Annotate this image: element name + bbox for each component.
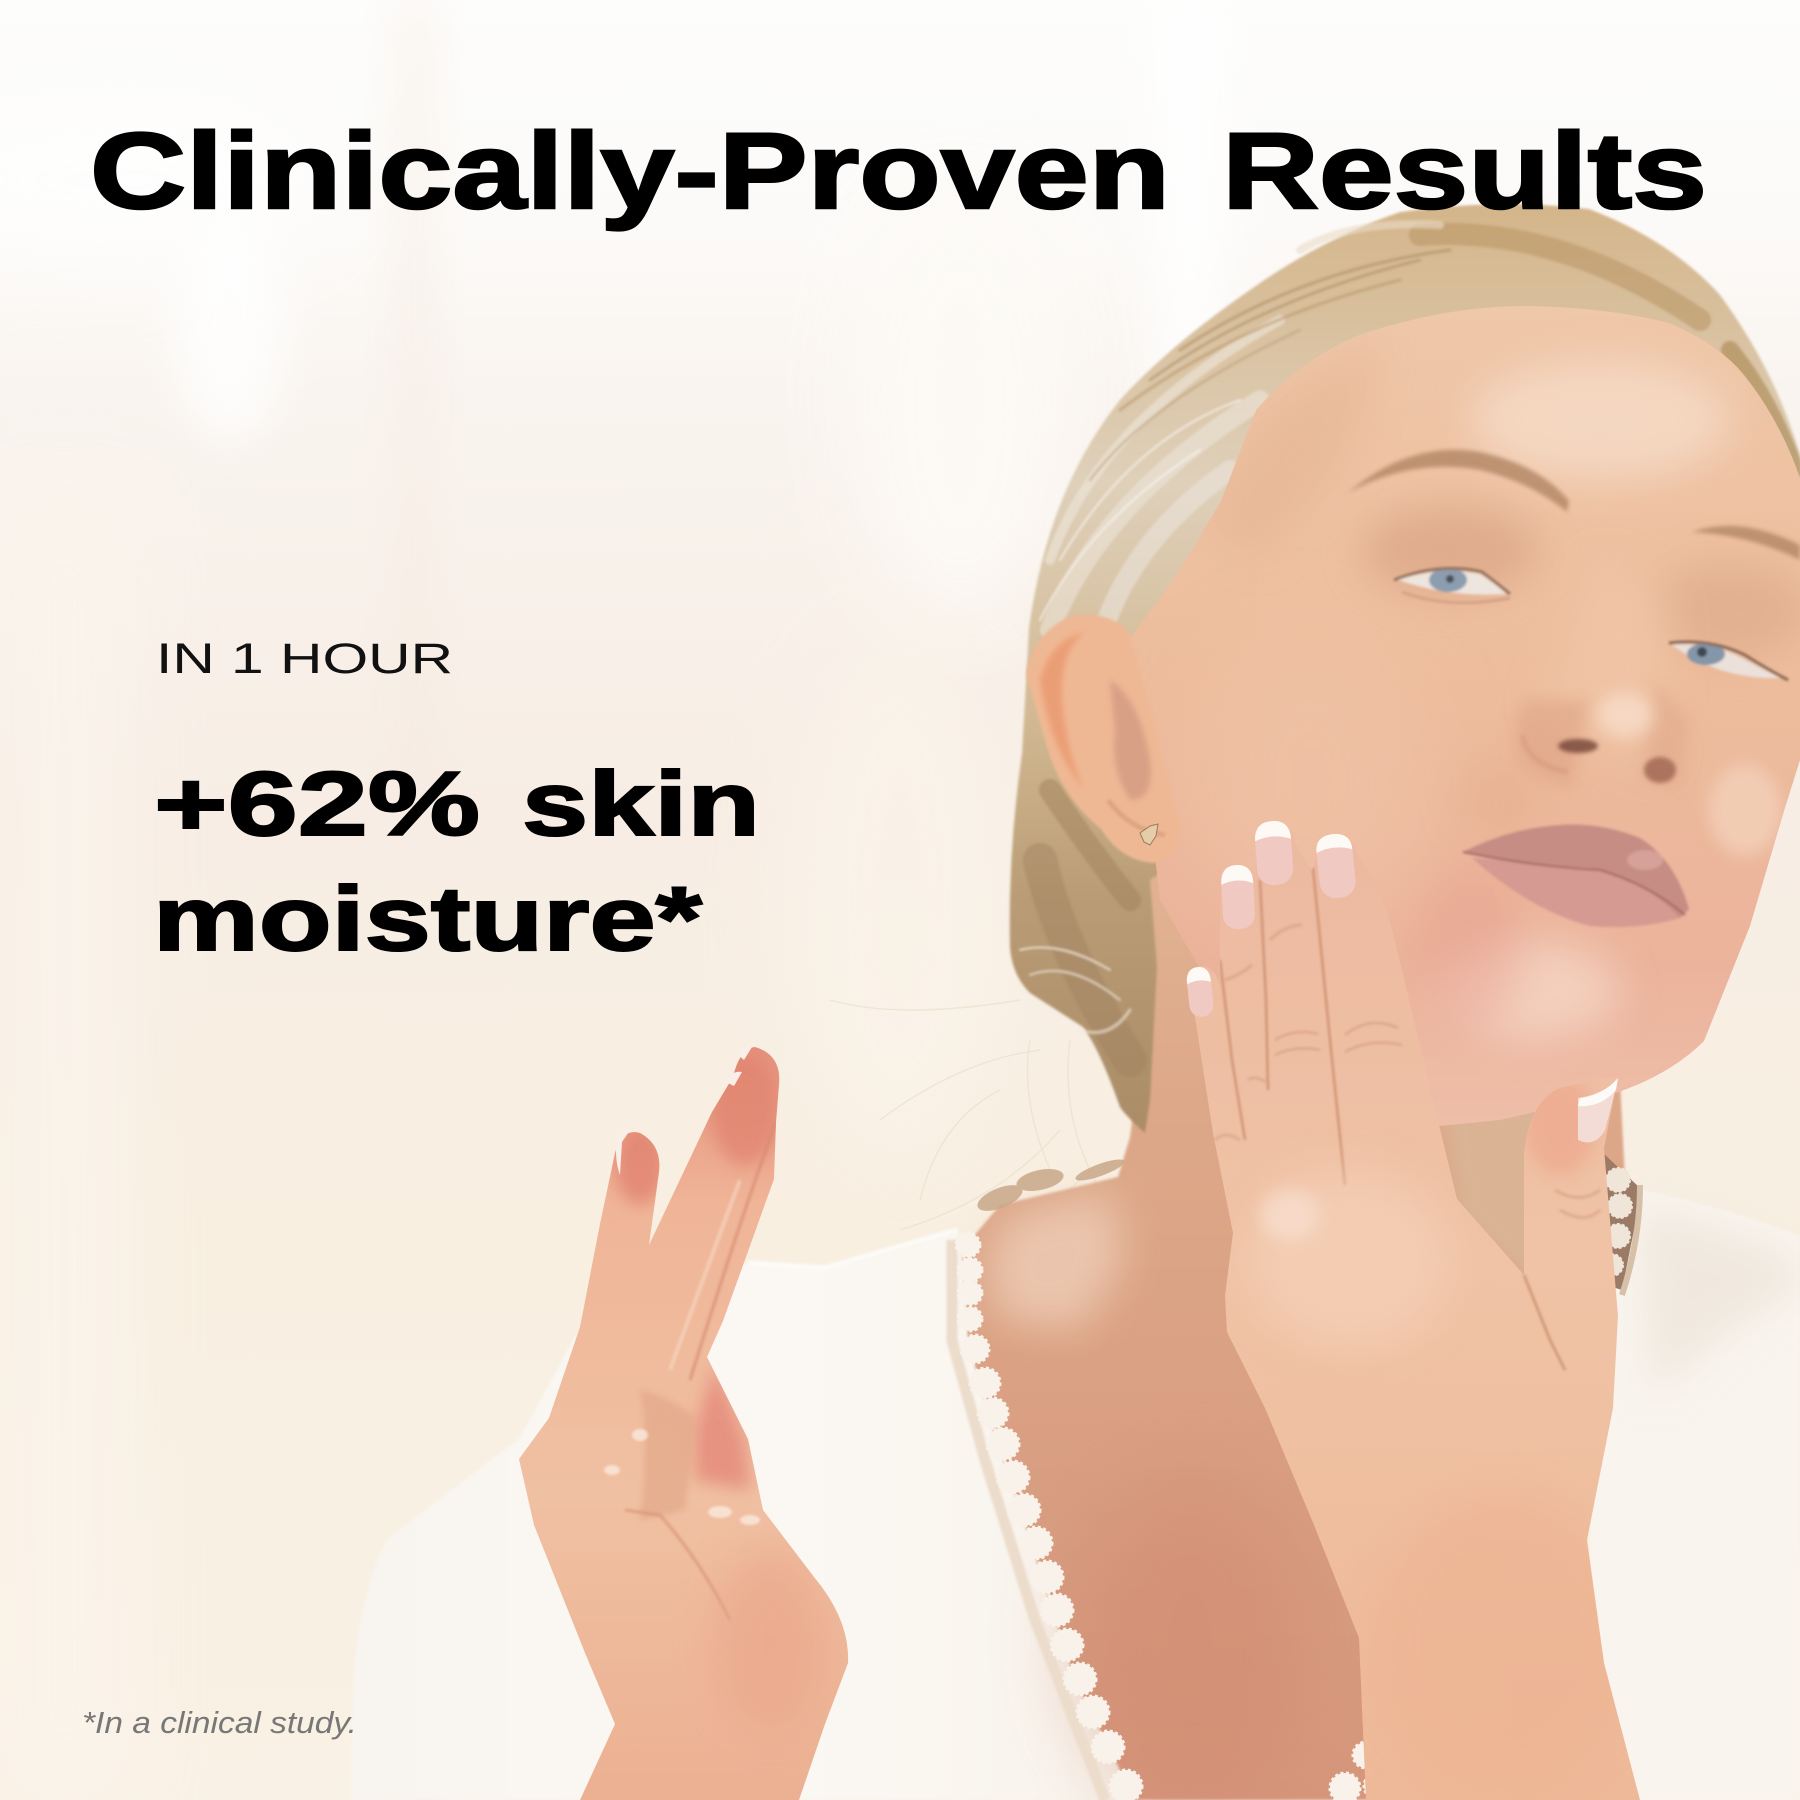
forehead highlight [1470,360,1730,480]
nose side shade [1516,699,1588,784]
photo: woman applying moisturizer [350,204,1800,1800]
lips [1463,825,1689,927]
blouse: left shoulder and sleeve [350,1230,1130,1800]
left hand base [510,1040,860,1800]
fingernails [1185,820,1618,1142]
left eye [1394,568,1510,603]
knuckle fold [640,1390,695,1520]
palm crease [625,1510,730,1620]
mouth surround [1460,760,1540,840]
face [1100,280,1800,1140]
footnote: *In a clinical study. [82,1705,357,1740]
stat headline [153,754,760,970]
hand back highlight [1250,1170,1450,1350]
eye socket shadow left [1360,505,1540,595]
thumb webbing line [1524,1275,1565,1370]
chin highlight [1440,940,1620,1040]
left fingernail tips [616,1046,752,1175]
lace at right collar [1590,1150,1642,1295]
knuckle highlight [1260,1189,1320,1241]
blouse: right shoulder shading [1640,1205,1800,1400]
right eye [1669,642,1788,680]
stray hair strands [830,1000,1100,1380]
title: Clinically-Proven [90,110,1170,231]
earring [1140,824,1158,845]
palm shading [715,1550,825,1730]
timeframe label: IN 1 HOUR [156,635,453,683]
hair strands [1020,224,1795,1060]
nose right side shade [1646,694,1685,778]
nose [1522,735,1676,783]
face base [1100,280,1800,1140]
stat headline: +62% [154,754,480,855]
lace at left collar, tan [974,1155,1126,1216]
finger gaps [1220,868,1345,1185]
nose bridge shading [1588,612,1654,700]
left eyebrow [1348,450,1569,512]
right hand [1180,820,1650,1800]
thumb pink [1524,1075,1596,1175]
title [90,110,1707,231]
fingertip red [616,1125,664,1205]
right cheek sheen [1709,764,1781,856]
eye socket shadow right [1668,563,1800,653]
chest redness [1070,1470,1310,1800]
nose tip highlight [1597,693,1653,737]
finger separator [690,1122,776,1380]
oil glisten [604,1429,760,1525]
chin pink [1432,892,1524,1026]
lace trim stripe [952,1240,1105,1800]
left hand [510,1040,860,1800]
right eyebrow [1692,526,1800,560]
knuckle creases [1215,925,1600,1218]
blouse: right shoulder [1590,1190,1800,1800]
stat headline: moisture* [153,869,703,970]
title: Results [1222,110,1707,231]
neck and chest skin [962,800,1625,1800]
finger gloss line [670,1180,740,1370]
neck shadow under jaw [1440,1090,1600,1290]
ear [1026,615,1181,863]
lace scallops along neckline [956,1233,1390,1800]
stat headline: skin [522,754,760,855]
blouse: left collar seam [748,1230,957,1268]
inner palm red [695,1365,750,1490]
cheek warmth [1301,851,1316,861]
temple shadow by hairline [1228,371,1356,526]
collarbone highlight [985,1190,1125,1330]
right hand base [1194,944,1640,1800]
hair [1010,204,1800,1133]
wrist warmth [1370,1490,1630,1790]
